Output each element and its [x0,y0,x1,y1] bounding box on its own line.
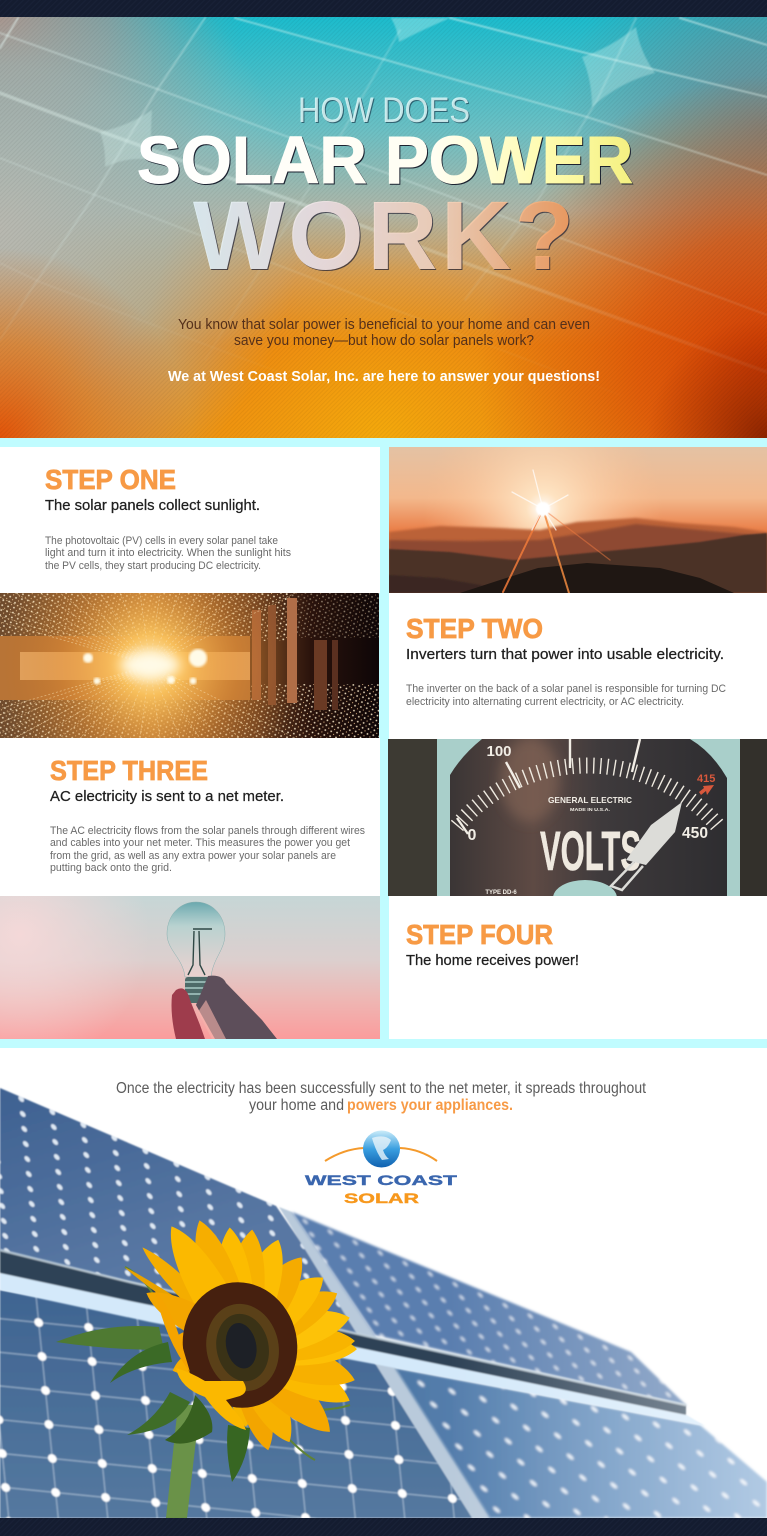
dial numbers: 100 [486,743,512,760]
teal hub [553,880,617,896]
intro paragraph: save you money—but how do solar panels work? [234,333,534,349]
red 415 mark [697,773,715,795]
heading: step two: STEP TWO [406,613,543,644]
dial numbers: 450 [682,825,708,842]
sunflower [56,1215,360,1518]
title: work: WORK? [193,181,574,290]
body: step two: The inverter on the back of a solar panel is responsible for turning DC [406,683,726,695]
panel: closing section [0,1048,767,1518]
logo: west coast solar: SOLAR [344,1190,419,1206]
body: step one: The photovoltaic (PV) cells in every solar panel take [45,535,278,547]
body: step three: from the grid, as well as any extra power your solar panels are [50,850,336,862]
dial face [450,739,727,896]
heading: step four: STEP FOUR [406,919,553,950]
dial numbers: GENERAL ELECTRIC [548,795,632,805]
sun rays [503,470,610,593]
front petals [155,1290,246,1430]
panel frame bar [0,1250,705,1426]
heading: step one: STEP ONE [45,464,176,495]
image: hand holding light bulb [0,896,380,1039]
body: step one: the PV cells, they start producing DC electricity. [45,560,261,572]
subheading: step one: The solar panels collect sunlight. [45,498,260,514]
panel: hero header [0,17,767,438]
dial numbers: 0 [468,827,477,844]
body: step three: The AC electricity flows from the solar panels through different wires [50,825,366,837]
bottom dark bar [0,1518,767,1536]
stem [166,1405,196,1518]
panel: step four [389,896,767,1039]
bulb [167,902,225,1003]
radial ray lines [0,593,295,738]
closing text [116,1080,647,1114]
body: step one [45,535,292,572]
title: how does: HOW DOES [298,91,470,130]
top dark bar [0,0,767,17]
columns on the right [252,598,338,710]
intro paragraph [178,317,590,349]
logo globe [363,1130,400,1168]
intro callout: We at West Coast Solar, Inc. are here to answer your questions! [168,369,600,385]
title: solar power: SOLAR POWER [137,123,633,198]
closing text: Once the electricity has been successfully sent to the net meter, it spreads throughout [116,1080,647,1097]
petals [123,1215,360,1454]
red 415 mark: 415 [697,773,715,785]
subheading: step four: The home receives power! [406,953,579,969]
logo arc [325,1148,437,1161]
inner room band [0,636,250,700]
heading: step three: STEP THREE [50,755,208,786]
hand [172,976,277,1039]
image: mountain sunset [389,447,767,593]
solar panel array photo [0,1048,767,1518]
seed head [182,1282,298,1408]
dial numbers: MADE IN U.S.A. [570,807,610,812]
body: step one: light and turn it into electricity. When the sunlight hits [45,547,292,559]
solar cell grid lines and corner diamonds [0,18,767,395]
dial numbers: TYPE DD-6 [485,890,517,896]
volts label: VOLTS [540,819,641,882]
logo wordmark: WEST COAST [305,1172,458,1188]
image: light rays data tunnel [0,593,379,738]
panel: step two [389,593,767,739]
dial ticks [457,766,718,826]
hero gradient background [0,17,767,438]
body: step three: and cables into your net meter. This measures the power you get [50,837,350,849]
body: step two: electricity into alternating current electricity, or AC electricity. [406,696,684,708]
glowing lights [83,649,207,684]
body: step two [406,683,726,708]
image: volts meter [388,739,767,896]
subheading: step two: Inverters turn that power into usable electricity. [406,647,724,663]
panel: step one [0,447,380,593]
closing text: powers your appliances. [347,1097,513,1114]
closing text: your home and [249,1097,344,1114]
panel: step three [0,738,380,896]
needle [611,802,682,890]
body: step three [50,825,366,874]
leaves [56,1267,350,1482]
logo: west coast solar [305,1130,458,1206]
intro paragraph: You know that solar power is beneficial to your home and can even [178,317,590,333]
dial numbers [468,743,708,896]
body: step three: putting back onto the grid. [50,862,172,874]
subheading: step three: AC electricity is sent to a net meter. [50,789,284,805]
